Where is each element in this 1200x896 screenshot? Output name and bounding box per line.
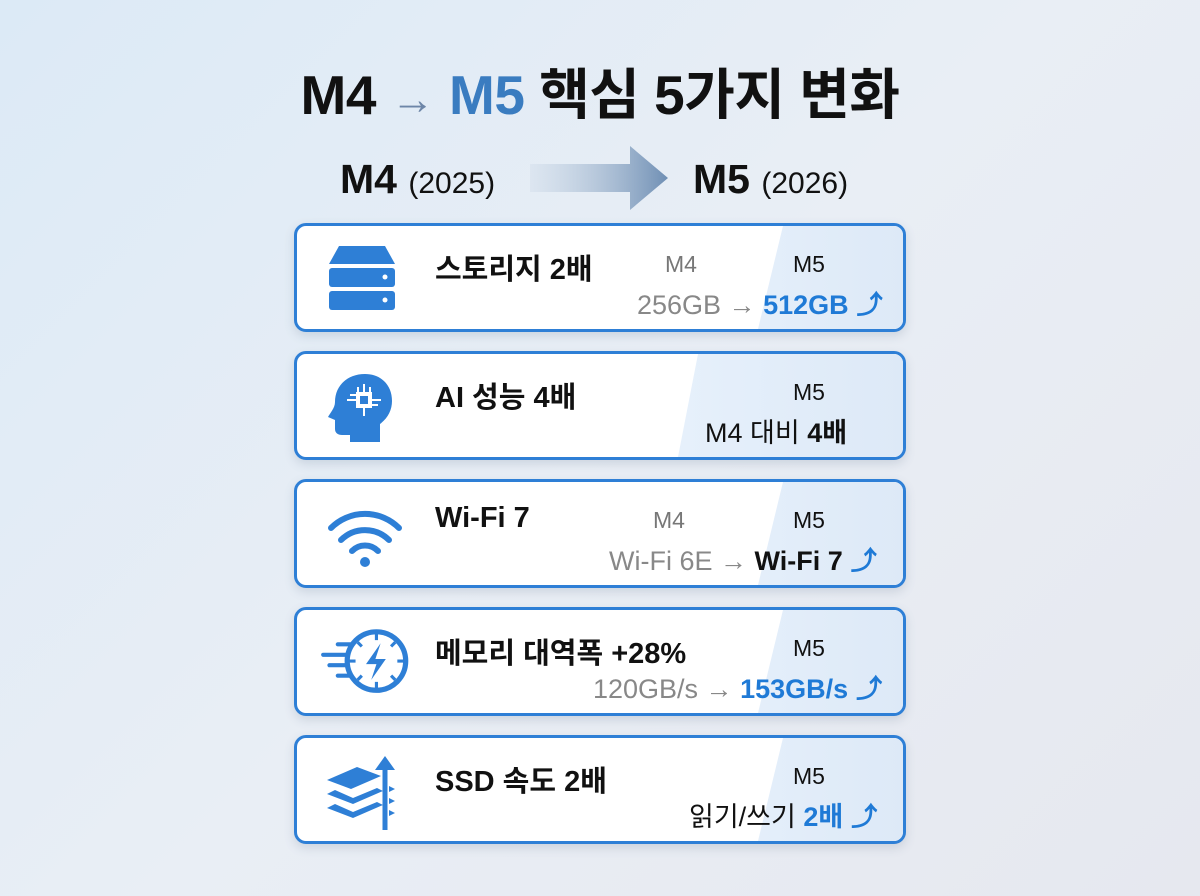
card: storage: M4 <box>665 251 697 277</box>
card: AI: M4 대비 4배 <box>705 418 847 448</box>
subheader: M4 (2025): M4 (2025) <box>340 156 495 202</box>
card: memory <box>294 607 906 716</box>
card: storage <box>294 223 906 332</box>
card: storage: 스토리지 2배 <box>435 254 593 286</box>
card: AI: AI 성능 4배 <box>435 382 576 414</box>
icon: memory gauge <box>321 629 408 693</box>
card: SSD: M5 <box>793 763 825 789</box>
card: wifi <box>294 479 906 588</box>
card: SSD <box>294 735 906 844</box>
icon: storage <box>329 246 395 310</box>
card: wifi: M5 <box>793 507 825 533</box>
icon: AI head <box>328 374 392 442</box>
card: memory: M5 <box>793 635 825 661</box>
card: storage: M5 <box>793 251 825 277</box>
arrow: M4 to M5 <box>530 146 668 210</box>
card: SSD: 읽기/쓰기 2배 ⤴ <box>689 802 878 832</box>
card: SSD: SSD 속도 2배 <box>435 766 607 798</box>
card: storage: 256GB → 512GB ⤴ <box>637 290 883 320</box>
card: memory: 메모리 대역폭 +28% <box>435 638 686 670</box>
subheader: M5 (2026): M5 (2026) <box>693 156 848 202</box>
card: wifi: Wi-Fi 7 <box>435 502 530 534</box>
title: M4 → M5 핵심 5가지 변화 <box>301 64 899 126</box>
card: AI <box>294 351 906 460</box>
card: wifi: M4 <box>653 507 685 533</box>
card: AI: M5 <box>793 379 825 405</box>
card: wifi: Wi-Fi 6E → Wi-Fi 7 ⤴ <box>609 546 877 576</box>
icon: SSD layers <box>327 756 395 830</box>
icon: wifi <box>328 510 402 567</box>
card: memory: 120GB/s → 153GB/s ⤴ <box>593 674 883 704</box>
